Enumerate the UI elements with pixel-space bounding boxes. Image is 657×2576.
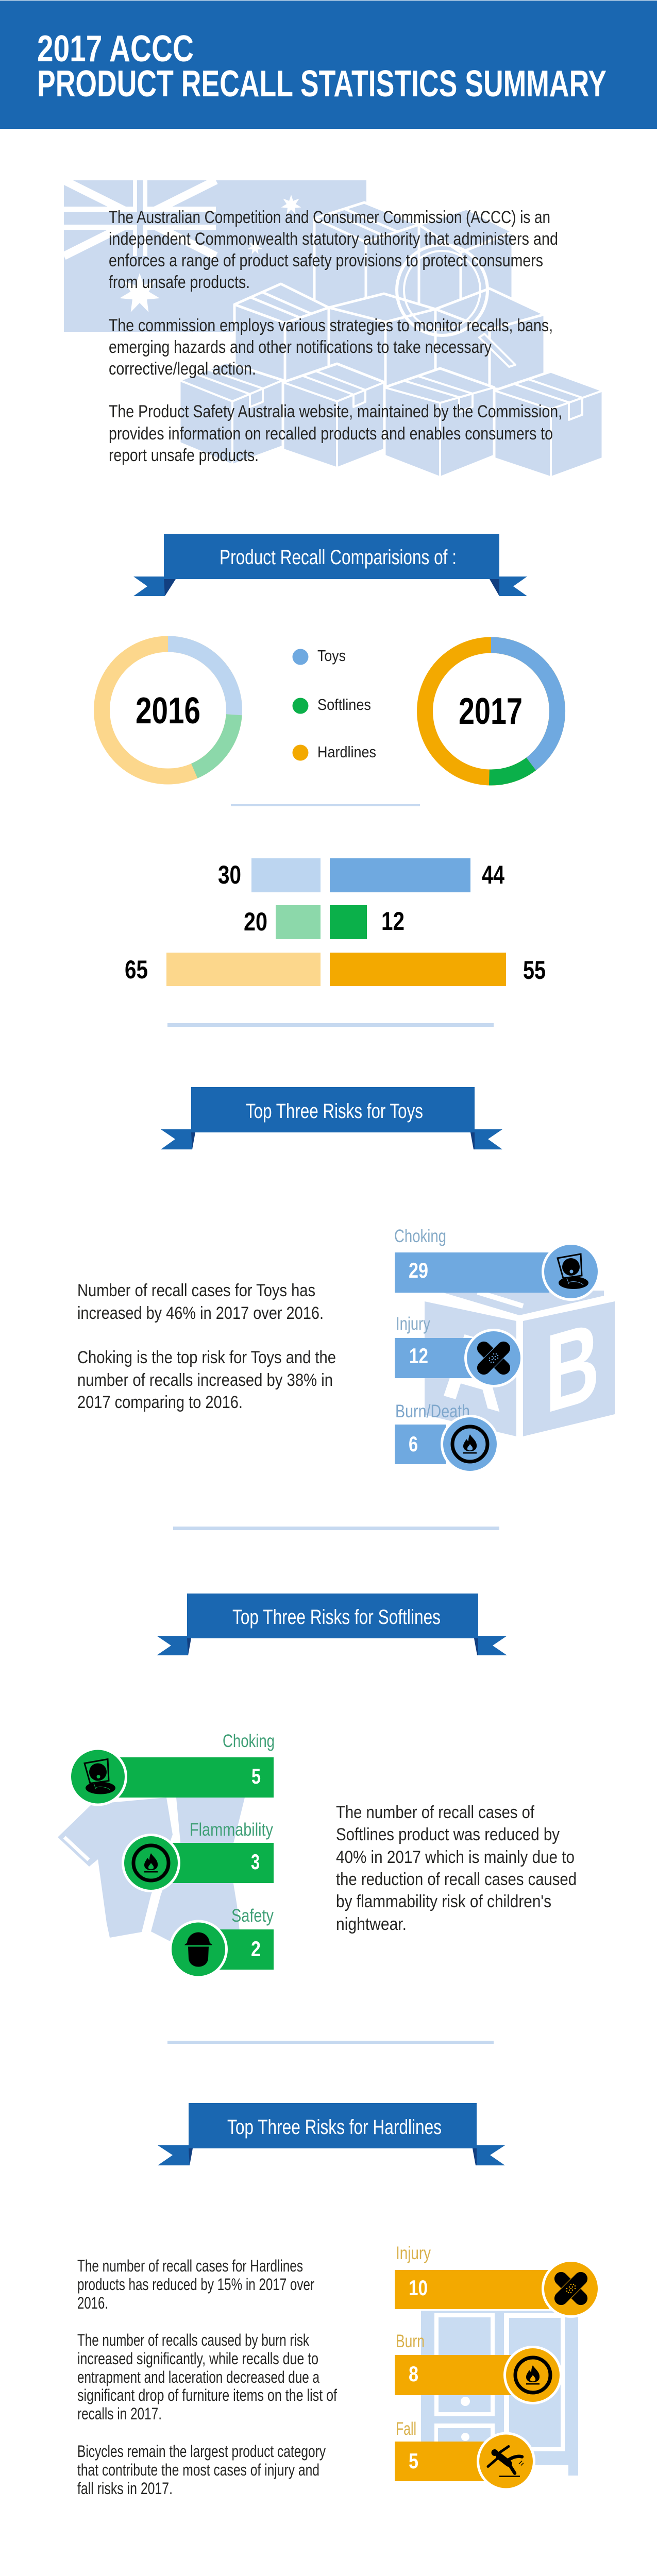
risk: choking: 5 [251,1764,261,1788]
text block: hardlines: recalls in 2017. [77,2404,162,2423]
risk: burn: 8 [409,2362,418,2386]
heading ribbon: toys [161,1087,502,1149]
risk: injury: Injury [396,2243,431,2263]
text block: softlines: The number of recall cases of [336,1803,534,1822]
title: 2017 ACCC [37,28,194,70]
risk: fall: 5 [409,2449,418,2473]
risk: injury [395,2243,600,2318]
risk: choking [394,1226,600,1301]
risk: injury [395,1314,523,1387]
risk: safety [169,1906,274,1978]
text block: hardlines [77,2257,337,2498]
donut chart: 2017: 2017 [459,691,523,732]
text block: hardlines: 2016. [77,2294,108,2312]
text block: hardlines: significant drop of furniture items on the list of [77,2386,337,2404]
donut chart: 2016: 2016 [136,690,200,732]
text block: hardlines: increased significantly, while recalls due to [77,2349,318,2368]
heading ribbon: softlines: Top Three Risks for Softlines [232,1606,441,1629]
text block: softlines: the reduction of recall cases caused [336,1870,577,1889]
text block: hardlines: Bicycles remain the largest product category [77,2442,326,2461]
chart: toys risks [394,1226,615,1473]
legend: Hardlines [317,743,376,761]
text block: intro paragraph 1: The Australian Competition and Consumer Commission (ACCC) is an [109,208,550,227]
bar row: softlines: 12 [381,907,405,936]
bar row: hardlines [125,953,546,986]
risk: injury: 12 [409,1344,428,1368]
risk: injury: Injury [396,1314,430,1334]
illustration: cabinet [421,2311,578,2476]
text block: toys [77,1281,336,1412]
risk: flammability: 3 [251,1850,260,1874]
risk: burn: Burn [396,2331,425,2351]
text block: softlines [336,1803,577,1934]
panel: introduction [64,180,603,478]
heading ribbon: toys: Top Three Risks for Toys [246,1100,423,1123]
text block: hardlines: entrapment and laceration decreased due a [77,2368,319,2386]
text block: toys: number of recalls increased by 38% in [77,1370,333,1390]
text block: intro paragraph 1 [109,208,558,292]
illustration: stacked boxes and magnifier [179,202,603,478]
risk: safety: Safety [231,1906,274,1926]
legend: Softlines [317,696,371,714]
legend [293,647,376,761]
heading ribbon: hardlines: Top Three Risks for Hardlines [227,2116,442,2139]
title [37,28,607,105]
donut chart: 2016 [102,644,234,776]
risk: burn/death [395,1401,499,1473]
risk: choking [69,1731,275,1806]
risk: flammability: Flammability [190,1820,273,1840]
text block: intro paragraph 2 [109,316,553,379]
legend: Toys [317,647,346,665]
risk: injury: 10 [409,2276,428,2300]
text block: hardlines: The number of recalls caused by burn risk [77,2331,310,2349]
text block: intro paragraph 3: report unsafe products. [109,446,259,465]
text block: toys: 2017 comparing to 2016. [77,1393,243,1412]
bar row: toys: 30 [218,860,241,889]
bar chart: 2016 vs 2017 [125,858,546,986]
bar row: softlines [244,905,405,939]
illustration: australian flag [64,180,366,332]
text block: hardlines: that contribute the most cases of injury and [77,2461,319,2479]
text block: intro paragraph 1: independent Commonwealth statutory authority that administers and [109,229,558,249]
donut chart: 2017 [425,645,558,777]
heading ribbon: product recall comparisons: Product Recall Comparisions of : [220,546,457,569]
text block: softlines: Softlines product was reduced by [336,1825,560,1844]
bar row: hardlines: 65 [125,955,148,984]
text block: intro paragraph 2: corrective/legal action. [109,359,256,379]
heading ribbon: hardlines [158,2103,505,2165]
text block: intro paragraph 3: The Product Safety Australia website, maintained by the Commission, [109,402,562,421]
chart: softlines risks [58,1731,275,1978]
illustration: toy block [425,1291,615,1437]
risk: burn/death: 6 [409,1432,418,1456]
risk: safety: 2 [251,1937,261,1961]
text block: intro paragraph 3 [109,402,562,465]
risk: burn [395,2331,562,2404]
bar row: toys [218,858,504,892]
risk: burn/death: Burn/Death [395,1401,470,1421]
text block: intro paragraph 2: emerging hazards and other notifications to take necessary [109,337,492,357]
text block: intro paragraph 2: The commission employs various strategies to monitor recalls, bans, [109,316,553,335]
risk: fall: Fall [396,2419,416,2439]
text block: hardlines: fall risks in 2017. [77,2479,173,2498]
text block: softlines: by flammability risk of children's [336,1892,551,1911]
risk: fall [395,2419,535,2490]
heading ribbon: product recall comparisons [133,534,527,596]
text block: intro paragraph 1: from unsafe products. [109,273,250,292]
text block: hardlines: The number of recall cases for Hardlines [77,2257,303,2275]
risk: flammability [122,1820,274,1892]
text block: softlines: 40% in 2017 which is mainly due to [336,1848,575,1867]
text block: toys: Choking is the top risk for Toys and the [77,1348,336,1367]
heading ribbon: softlines [157,1594,507,1655]
illustration: toy block: B [545,1298,600,1437]
risk: choking: 29 [409,1258,428,1282]
text block: softlines: nightwear. [336,1914,407,1934]
bar row: hardlines: 55 [523,956,546,985]
risk: choking: Choking [223,1731,275,1751]
header band [0,1,657,129]
risk: choking: Choking [394,1226,446,1246]
illustration: toy block: A [442,1307,502,1434]
bar row: softlines: 20 [244,907,267,936]
chart: hardlines risks [395,2243,600,2490]
text block: hardlines: products has reduced by 15% in 2017 over [77,2275,314,2294]
text block: intro paragraph 3: provides information on recalled products and enables consumers to [109,424,553,444]
text block: intro paragraph 1: enforces a range of product safety provisions to protect consumers [109,251,543,270]
text block: toys: increased by 46% in 2017 over 2016. [77,1303,324,1323]
bar row: toys: 44 [482,860,504,889]
text block: toys: Number of recall cases for Toys has [77,1281,315,1300]
illustration: shirt [58,1798,245,1941]
